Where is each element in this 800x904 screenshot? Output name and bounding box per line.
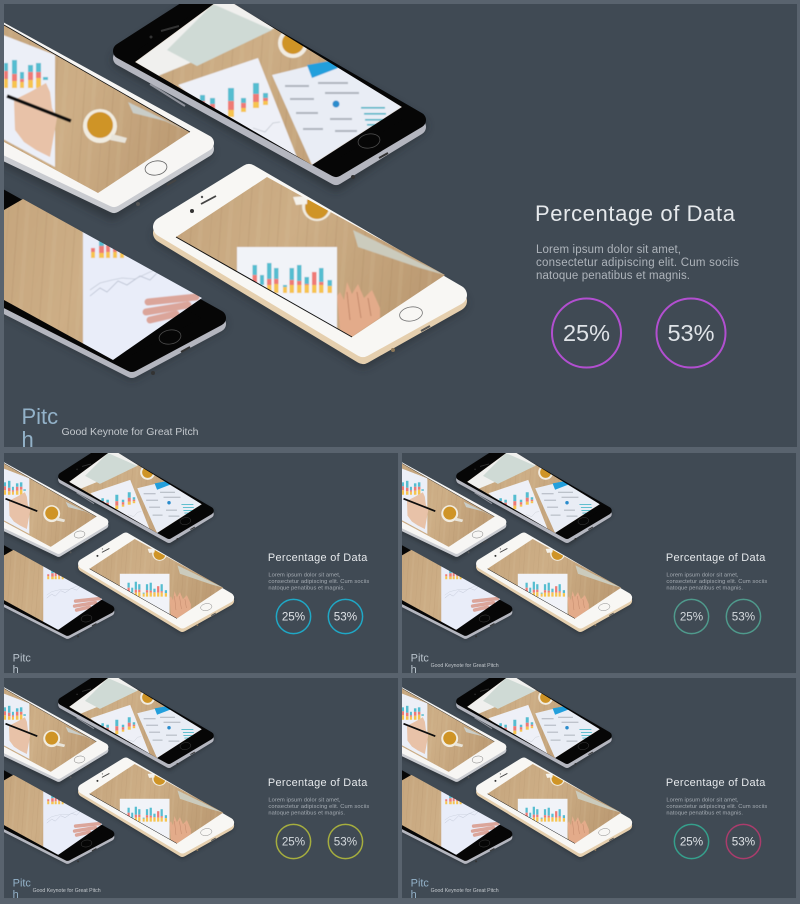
circle stat 25%: 25% — [563, 320, 610, 346]
heading: Percentage of Data — [268, 552, 368, 564]
circle stat 53%: 53% — [732, 610, 755, 623]
panel: slide variant olive — [0, 671, 398, 901]
body text: natoque penatibus et magnis. — [268, 811, 345, 817]
logo: h — [411, 889, 417, 901]
circle stat 25%: 25% — [282, 835, 305, 848]
body text: Lorem ipsum dolor sit amet, — [536, 244, 681, 256]
logo: h — [411, 664, 417, 676]
tagline: Good Keynote for Great Pitch — [33, 888, 101, 894]
phones illustration — [0, 671, 229, 862]
logo: Pitc — [411, 878, 429, 890]
panel: slide variant cyan — [0, 446, 398, 676]
circle stat 53% — [726, 824, 761, 859]
body text: natoque penatibus et magnis. — [268, 586, 345, 592]
circle stat 53% — [656, 298, 726, 368]
body text: consectetur adipiscing elit. Cum sociis — [268, 579, 369, 585]
panel: main slide — [0, 0, 797, 452]
phones illustration — [395, 671, 627, 862]
circle stat 53%: 53% — [334, 835, 357, 848]
circle stat 25% — [276, 824, 311, 859]
heading: Percentage of Data — [666, 777, 766, 789]
body text: Lorem ipsum dolor sit amet, — [666, 798, 739, 804]
circle stat 25%: 25% — [680, 835, 703, 848]
phones illustration — [0, 0, 457, 375]
body text: Lorem ipsum dolor sit amet, — [666, 573, 739, 579]
logo: Pitc — [411, 653, 429, 665]
body text: Lorem ipsum dolor sit amet, — [268, 798, 341, 804]
body text: consectetur adipiscing elit. Cum sociis — [536, 257, 739, 269]
phones illustration — [0, 446, 229, 637]
panel: slide variant teal and crimson — [395, 671, 796, 901]
circle stat 53% — [328, 599, 363, 634]
circle stat 25%: 25% — [282, 610, 305, 623]
heading: Percentage of Data — [268, 777, 368, 789]
body text: consectetur adipiscing elit. Cum sociis — [666, 804, 767, 810]
logo: Pitc — [22, 404, 58, 429]
body text: natoque penatibus et magnis. — [666, 811, 743, 817]
tagline: Good Keynote for Great Pitch — [62, 426, 199, 438]
circle stat 25%: 25% — [680, 610, 703, 623]
logo: Pitc — [13, 878, 31, 890]
circle stat 25% — [276, 599, 311, 634]
tagline: Good Keynote for Great Pitch — [431, 888, 499, 894]
body text: Lorem ipsum dolor sit amet, — [268, 573, 341, 579]
heading: Percentage of Data — [535, 201, 736, 226]
panel: slide variant green — [395, 446, 796, 676]
circle stat 25% — [674, 824, 709, 859]
logo: h — [22, 427, 34, 452]
body text: natoque penatibus et magnis. — [666, 586, 743, 592]
body text: consectetur adipiscing elit. Cum sociis — [268, 804, 369, 810]
circle stat 53% — [726, 599, 761, 634]
circle stat 25% — [552, 298, 621, 368]
body text: consectetur adipiscing elit. Cum sociis — [666, 579, 767, 585]
circle stat 53%: 53% — [732, 835, 755, 848]
logo: h — [13, 664, 19, 676]
circle stat 25% — [674, 599, 709, 634]
tagline: Good Keynote for Great Pitch — [431, 663, 499, 669]
heading: Percentage of Data — [666, 552, 766, 564]
body text: natoque penatibus et magnis. — [536, 270, 690, 282]
circle stat 53%: 53% — [667, 320, 715, 346]
logo: h — [13, 889, 19, 901]
circle stat 53% — [328, 824, 363, 859]
circle stat 53%: 53% — [334, 610, 357, 623]
phones illustration — [395, 446, 627, 637]
logo: Pitc — [13, 653, 31, 665]
